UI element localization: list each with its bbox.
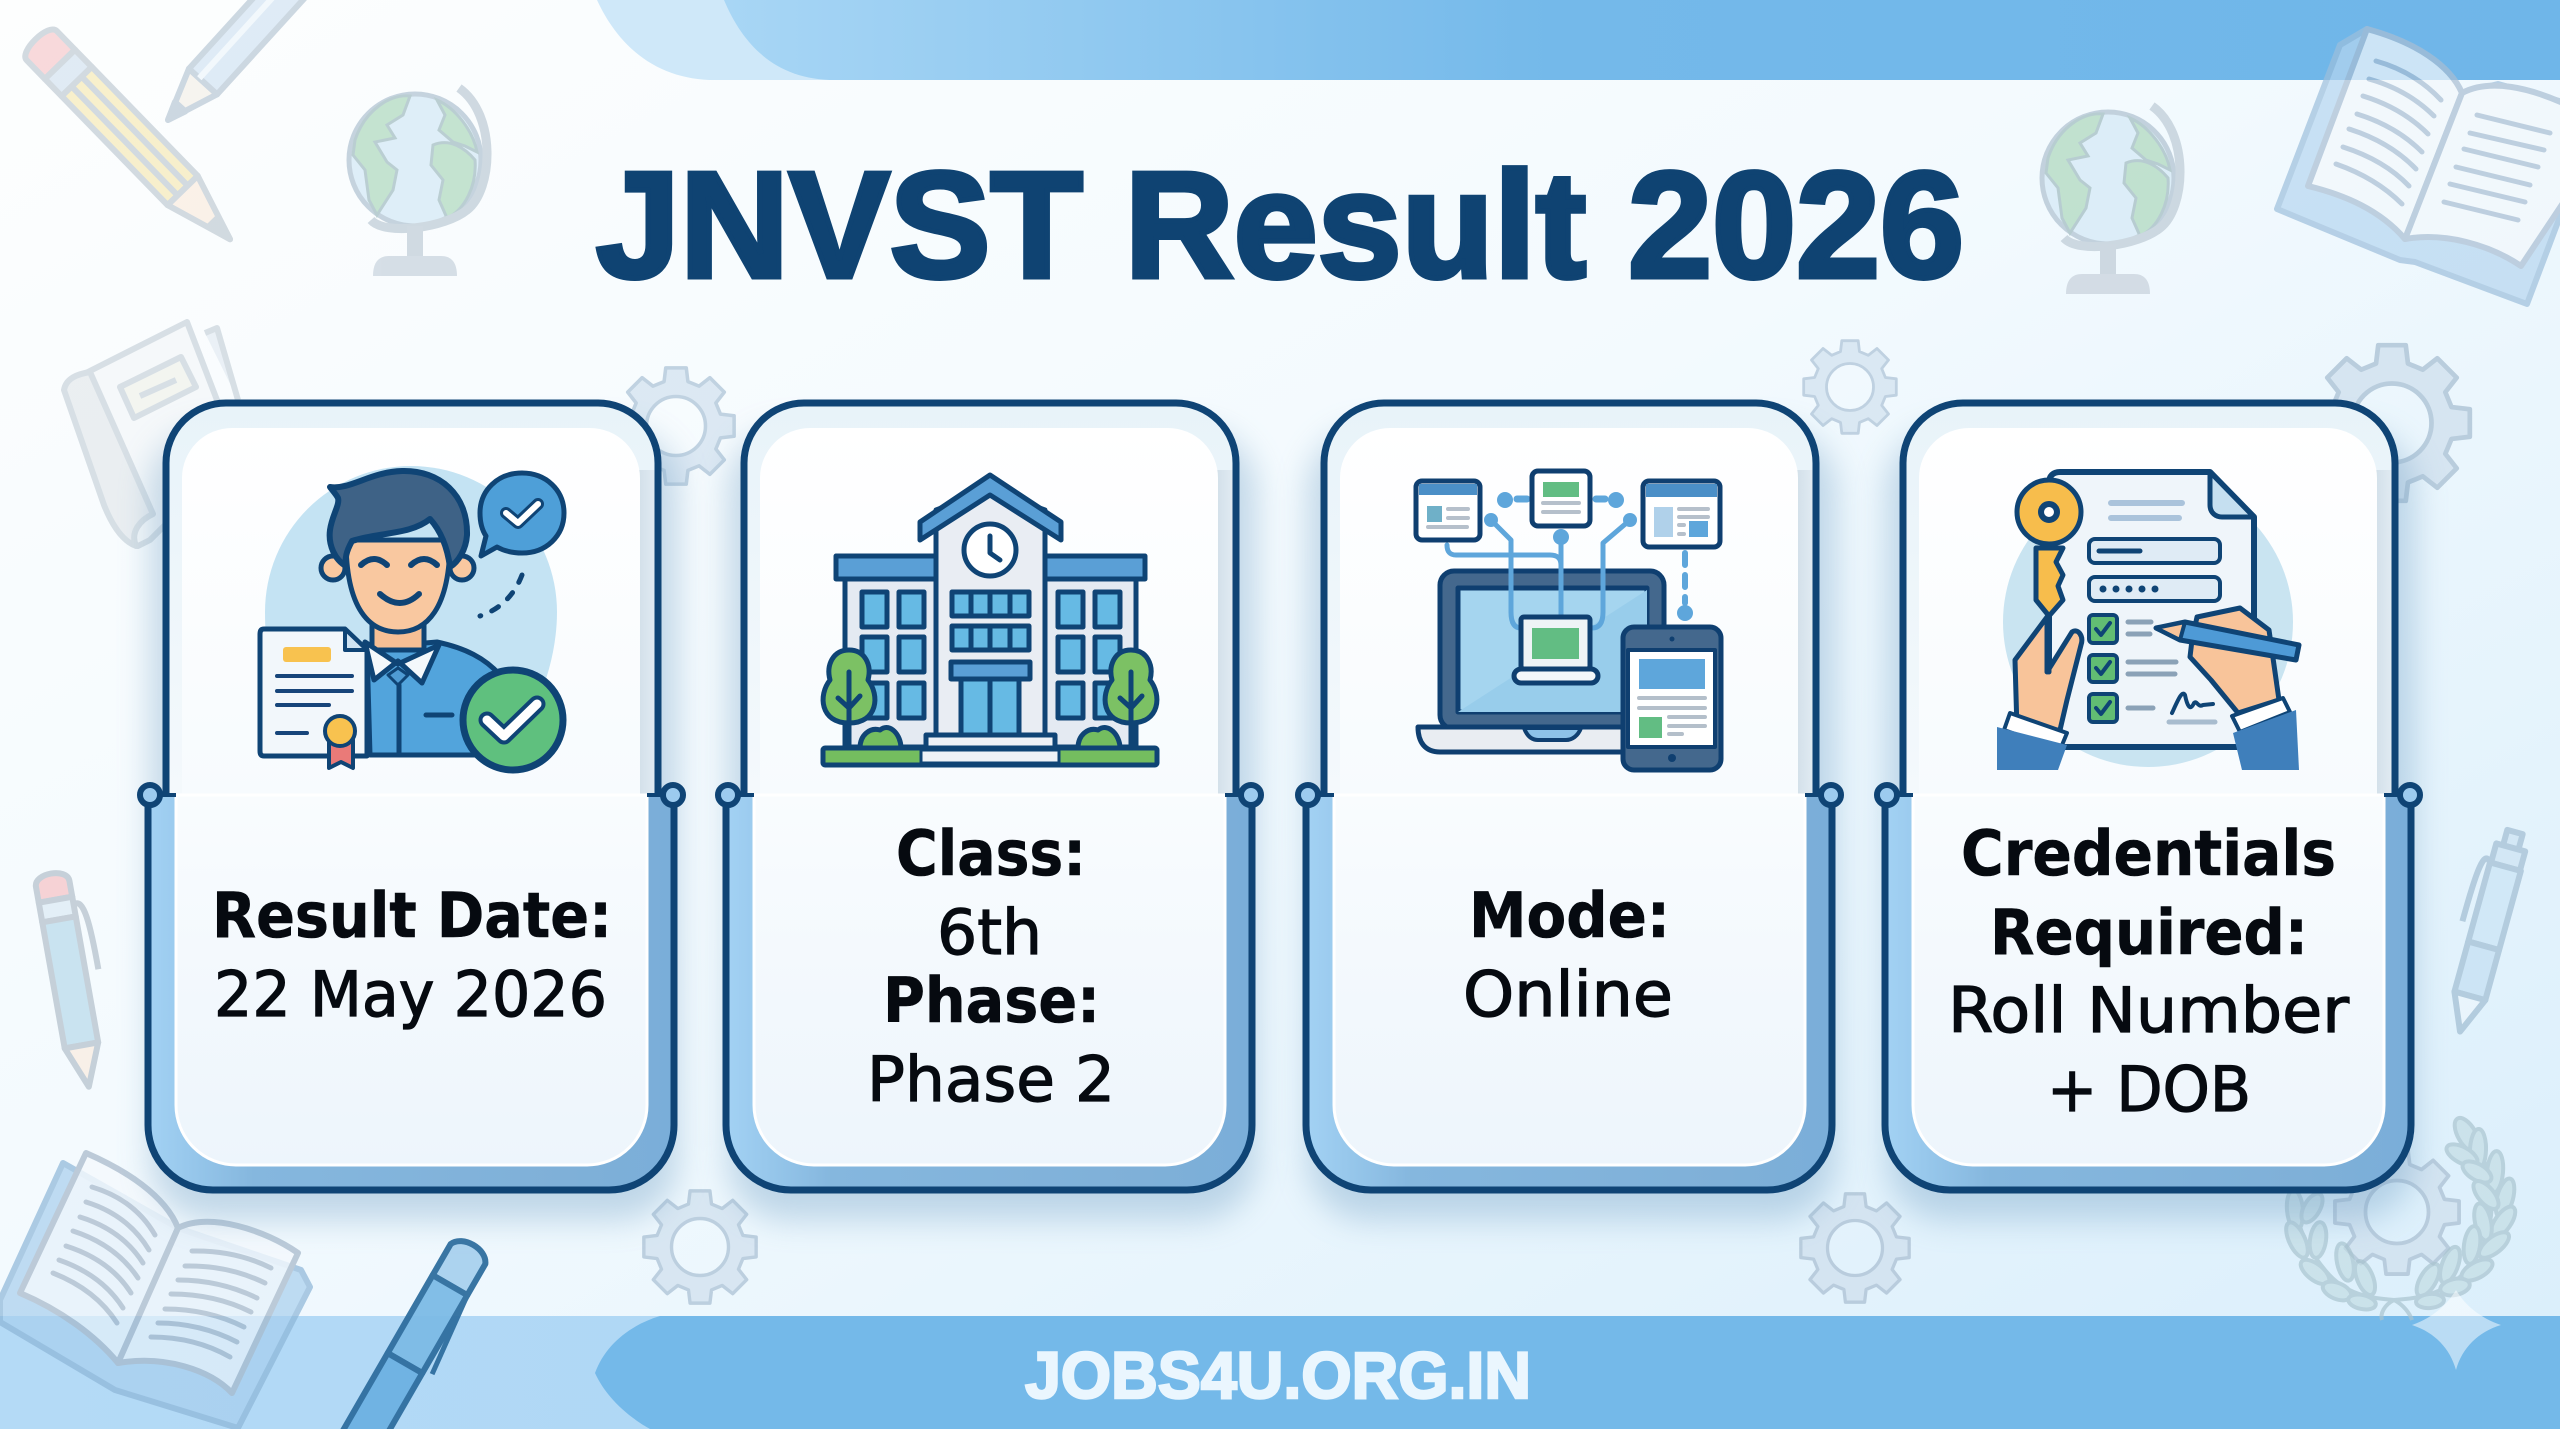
panel: class and phase (718, 403, 1261, 1220)
text: credentials: Required: (1990, 896, 2308, 969)
footer band (0, 1316, 2560, 1429)
icon: yellow pencil (20, 25, 245, 254)
text: result date: Result Date: (212, 879, 612, 952)
text: credentials (1948, 817, 2350, 1126)
icon: open book top right (2277, 29, 2560, 304)
icon: gear D (644, 1191, 756, 1303)
title: JNVST Result 2026 (596, 140, 1964, 309)
text: mode: Online (1463, 958, 1673, 1031)
icon: online devices (1416, 471, 1721, 770)
text: result date: 22 May 2026 (214, 958, 607, 1031)
icon: gear E (1801, 1194, 1909, 1302)
header band (597, 0, 2560, 80)
icon: credentials form with key (1997, 472, 2299, 770)
icon: school building (823, 475, 1157, 765)
icon: open book bottom left (0, 1153, 310, 1428)
icon: laurel wreath (2282, 1114, 2520, 1320)
icon: gear F (2335, 1150, 2459, 1274)
icon: notebook left (64, 322, 240, 546)
icon: blue pencil (154, 0, 325, 133)
text: class and phase: Phase 2 (867, 1043, 1115, 1116)
icon: right pen (2434, 825, 2530, 1036)
text: credentials: Credentials (1961, 817, 2336, 890)
icon: globe right (2042, 106, 2180, 294)
panel: credentials (1877, 403, 2420, 1220)
panel: result date (140, 403, 683, 1220)
text: class and phase (867, 817, 1115, 1116)
icon: sparkle (2412, 1290, 2501, 1370)
text: class and phase: Phase: (883, 964, 1100, 1037)
icon: student with certificate (260, 466, 564, 770)
icon: gear A (618, 368, 734, 484)
icon: pen bottom (338, 1235, 498, 1429)
icon: left pencil (34, 868, 118, 1090)
icon: gear C (2314, 345, 2470, 501)
text: mode (1463, 879, 1673, 1031)
text: credentials: + DOB (2047, 1053, 2251, 1126)
text: class and phase: Class: (896, 817, 1086, 890)
icon: globe left (349, 88, 487, 276)
text: class and phase: 6th (937, 896, 1042, 969)
footer text: JOBS4U.ORG.IN (1025, 1338, 1531, 1412)
text: result date (212, 879, 612, 1031)
icon: gear B (1804, 341, 1896, 433)
text: mode: Mode: (1469, 879, 1670, 952)
panel: mode (1298, 403, 1841, 1220)
text: credentials: Roll Number (1948, 974, 2350, 1047)
